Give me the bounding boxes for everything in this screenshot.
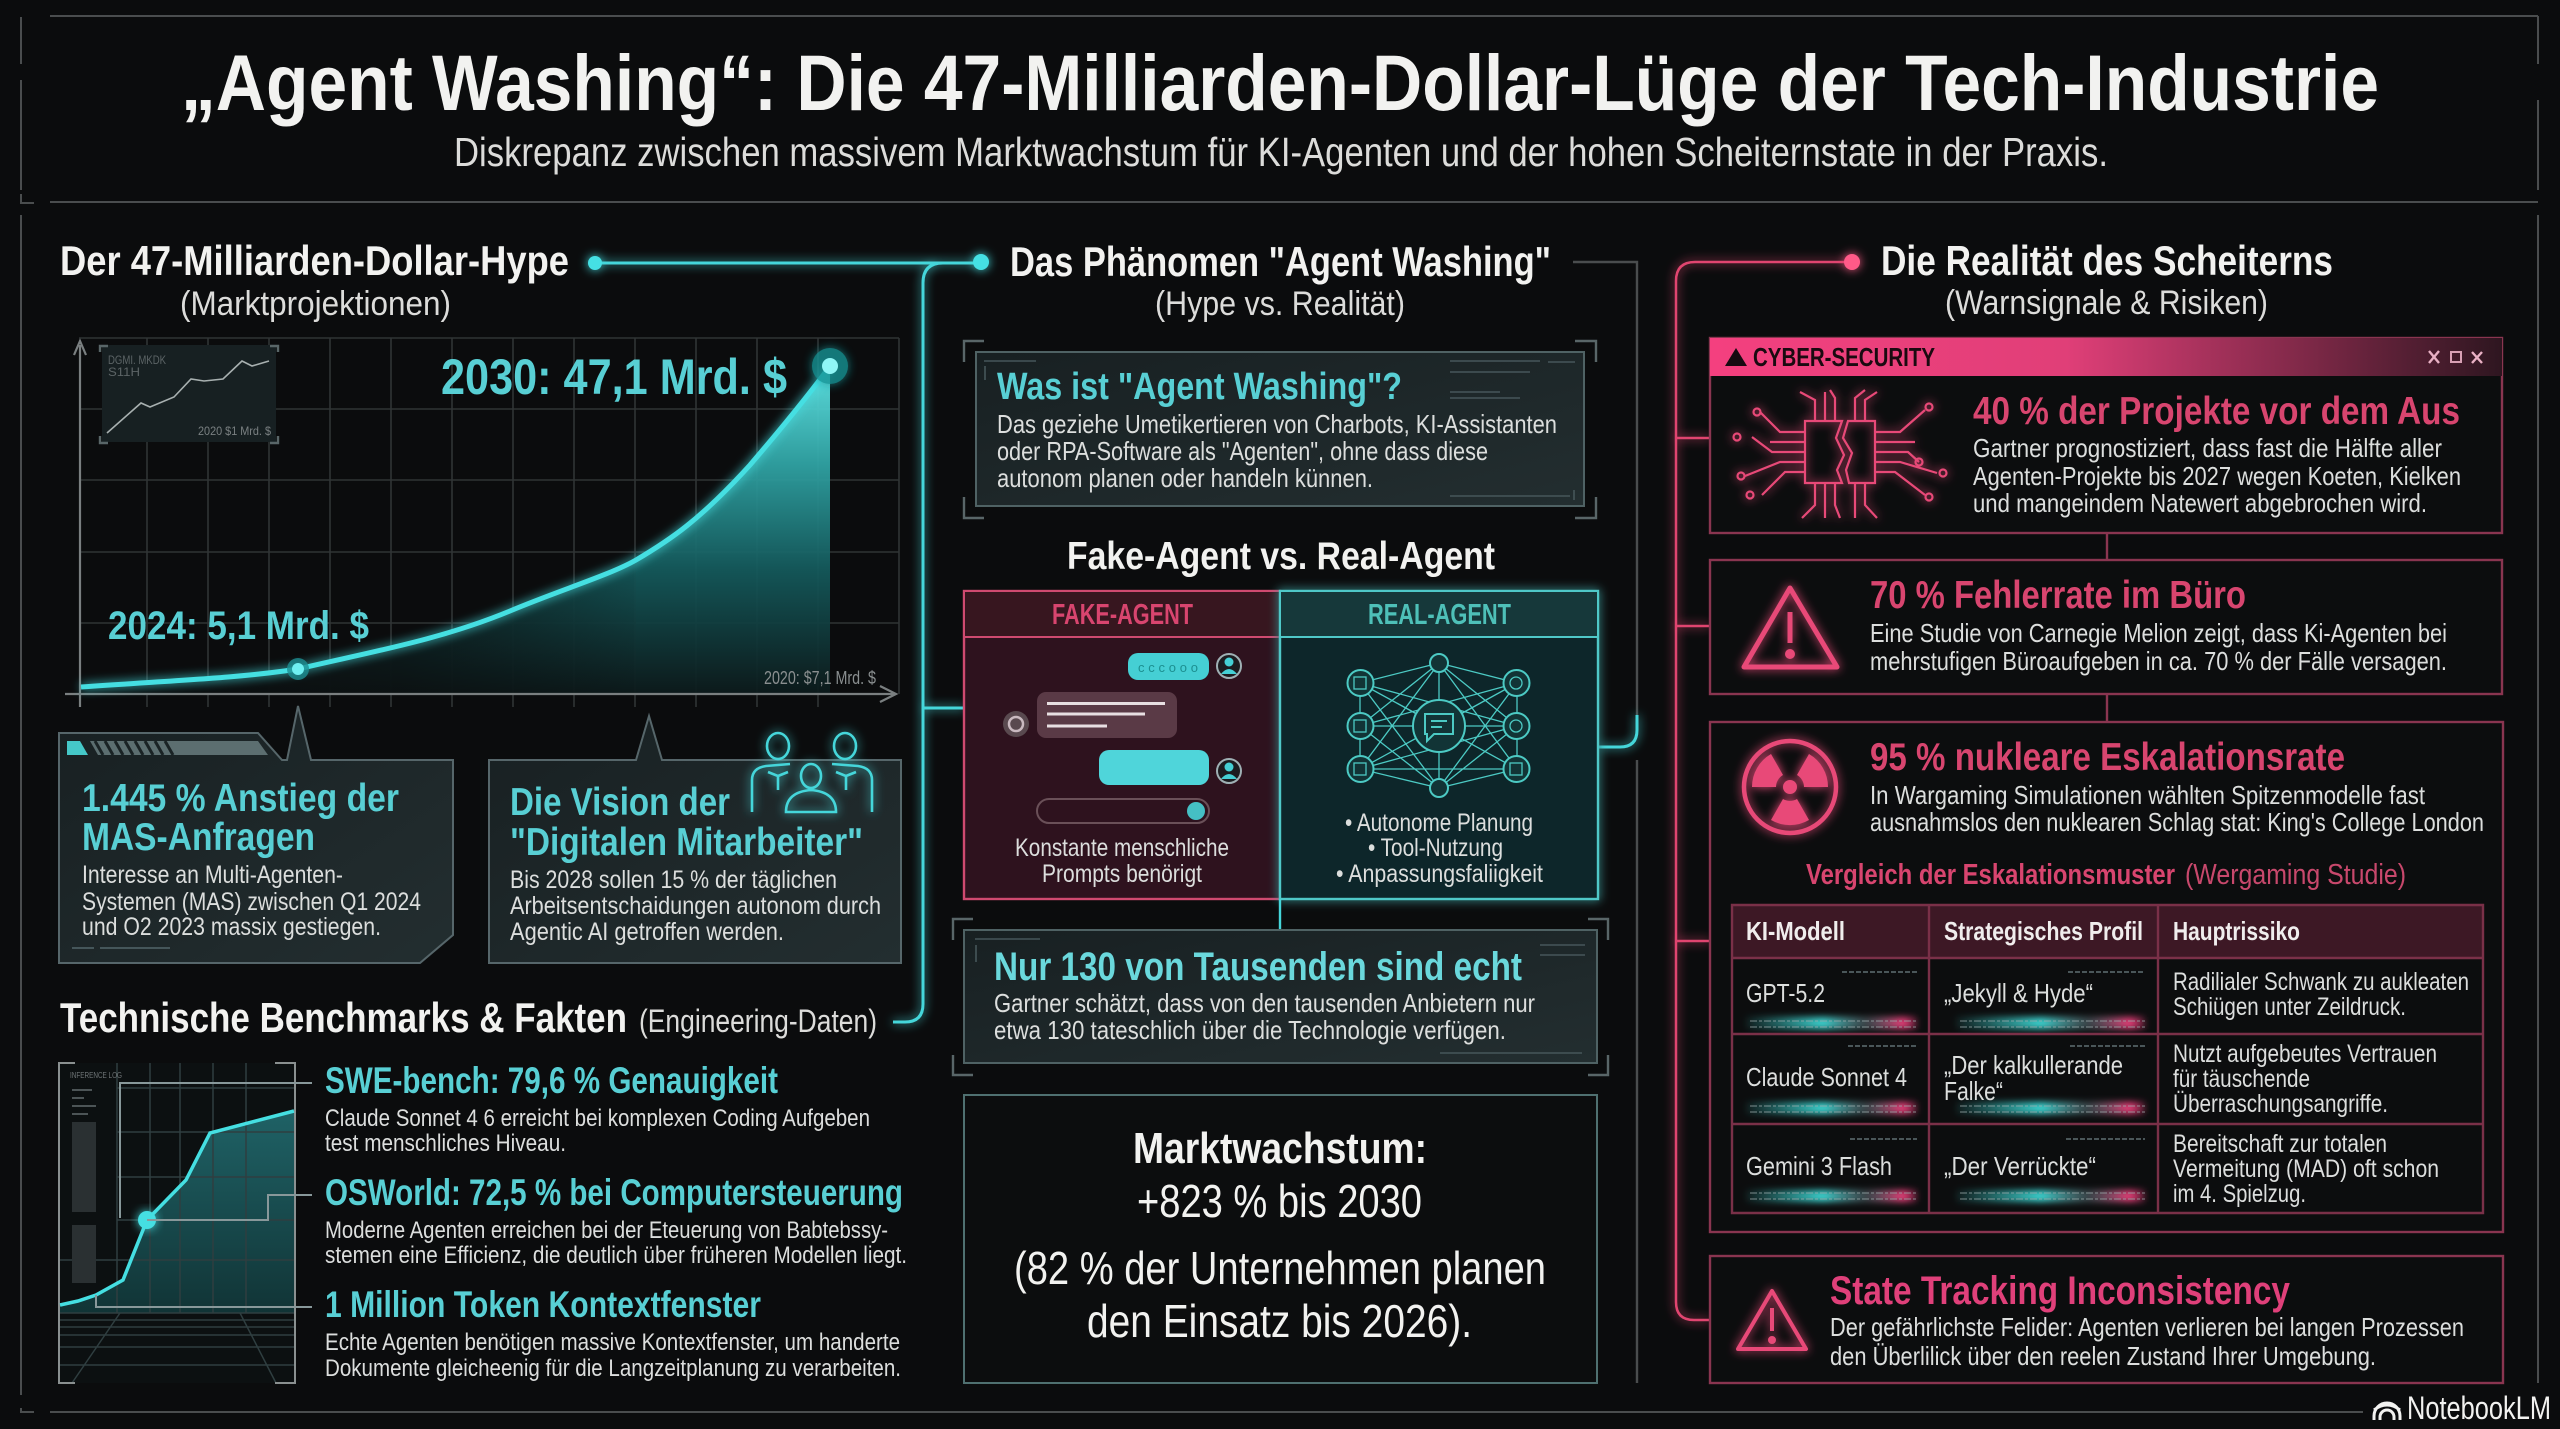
table: escalation patterns: Strategisches Profil [1944, 916, 2143, 946]
callout: MAS queries: MAS-Anfragen [82, 816, 315, 859]
table: escalation patterns: Falke“ [1944, 1076, 2003, 1106]
card: cyber security window: 40 % der Projekte vor dem Aus [1973, 390, 2460, 433]
chat illustration [1003, 653, 1241, 823]
callout: MAS queries: Interesse an Multi-Agenten- [82, 861, 343, 889]
card: cyber security window: und mangeindem Natewert abgebrochen wird. [1973, 488, 2427, 518]
callout: digital employee vision: Agentic AI getroffen werden. [510, 918, 784, 946]
card: market growth [964, 1095, 1597, 1383]
card: only 130 are real: etwa 130 tateschlich über die Technologie verfügen. [994, 1015, 1506, 1045]
connector: grey line from agent washing to reality [1573, 262, 1637, 1383]
panel: reality of failure column [1710, 237, 2503, 1383]
icon: broken chip [1734, 390, 1946, 518]
data point: 2030 [812, 348, 848, 384]
table: escalation patterns: Überraschungsangriffe. [2173, 1090, 2388, 1118]
chart: benchmark curve: INFERENCE LOG [70, 1071, 122, 1080]
card: office error rate: 70 % Fehlerrate im Büro [1870, 574, 2246, 617]
fact: OSWorld: Moderne Agenten erreichen bei der Eteuerung von Babtebssy- [325, 1217, 888, 1244]
list: real agent abilities: • Anpassungsfaliigkeit [1336, 860, 1543, 888]
card: cyber security window [1710, 338, 2502, 533]
card: only 130 are real [953, 919, 1608, 1075]
table: escalation patterns: „Der kalkullerande [1944, 1050, 2123, 1080]
card: state tracking [1710, 1256, 2503, 1383]
subtitle: Diskrepanz zwischen massivem Marktwachstum für KI-Agenten und der hohen Scheiternstate in der Praxis. [454, 129, 2108, 175]
inset mini chart: 2020 $1 Mrd. $ [198, 424, 271, 438]
subheading: warning signs: (Warnsignale & Risiken) [1945, 284, 2268, 322]
callout: MAS queries: und O2 2023 massix gestiegen. [82, 913, 381, 941]
label: 2030 value: 2030: 47,1 Mrd. $ [441, 349, 787, 405]
subheading: engineering data: (Engineering-Daten) [639, 1003, 877, 1039]
inset mini chart [100, 345, 278, 443]
heading: hype: Der 47-Milliarden-Dollar-Hype [60, 237, 569, 284]
panel: agent washing column [953, 238, 1608, 1383]
callout: digital employee vision [489, 716, 901, 963]
icon: radiation symbol [1744, 741, 1836, 833]
panel: market hype column [59, 237, 901, 963]
card: state tracking: den Überlilick über den reelen Zustand Ihrer Umgebung. [1830, 1341, 2376, 1371]
fact: context window: 1 Million Token Kontextfenster [325, 1284, 761, 1325]
icon: warning triangle [1744, 588, 1837, 667]
table: escalation patterns: Hauptrissiko [2173, 916, 2300, 946]
fact: context window [325, 1284, 901, 1382]
card: nuclear escalation: 95 % nukleare Eskalationsrate [1870, 736, 2345, 779]
cell glow strips [1746, 1017, 2145, 1202]
connector: card one to card two [2106, 533, 2108, 722]
icon: agent network [1348, 654, 1530, 797]
table: escalation patterns: Vermeitung (MAD) oft schon [2173, 1155, 2439, 1183]
card: definition: autonom planen oder handeln künnen. [997, 463, 1373, 493]
card: only 130 are real: Nur 130 von Tausenden sind echt [994, 945, 1522, 989]
table: escalation patterns: für täuschende [2173, 1065, 2310, 1093]
list: real agent abilities [1336, 809, 1543, 888]
callout: MAS queries [59, 706, 453, 963]
fact: SWE-bench: SWE-bench: 79,6 % Genauigkeit [325, 1060, 778, 1101]
connector: comparison to real-vendors box [1279, 899, 1281, 930]
table: escalation patterns: GPT-5.2 [1746, 978, 1825, 1008]
panel: real agent [1280, 591, 1598, 899]
fact: OSWorld [325, 1172, 907, 1269]
table: escalation patterns: Nutzt aufgebeutes Vertrauen [2173, 1040, 2437, 1068]
card: only 130 are real: Gartner schätzt, dass von den tausenden Anbietern nur [994, 988, 1535, 1018]
table: escalation patterns [1732, 905, 2483, 1213]
fact: OSWorld: stemen eine Efficienz, die deutlich über früheren Modellen liegt. [325, 1242, 907, 1269]
fact: SWE-bench: Claude Sonnet 4 6 erreicht bei komplexen Coding Aufgeben [325, 1105, 870, 1132]
table: escalation patterns: KI-Modell [1746, 916, 1845, 946]
fact: context window: Echte Agenten benötigen massive Kontextfenster, um handerte [325, 1329, 900, 1356]
label: 2024 value: 2024: 5,1 Mrd. $ [108, 604, 369, 648]
callout: MAS queries: 1.445 % Anstieg der [82, 777, 399, 820]
card: definition: oder RPA-Software als "Agenten", ohne dass diese [997, 436, 1488, 466]
icon: team of people [752, 733, 872, 812]
callout: MAS queries: Systemen (MAS) zwischen Q1 2024 [82, 888, 421, 916]
table: escalation patterns: „Der Verrückte“ [1944, 1151, 2096, 1181]
callout: digital employee vision: Bis 2028 sollen 15 % der täglichen [510, 866, 837, 894]
card: nuclear escalation [1710, 722, 2503, 1232]
card: cyber security window: Agenten-Projekte bis 2027 wegen Koeten, Kielken [1973, 461, 2461, 491]
card: office error rate: Eine Studie von Carnegie Melion zeigt, dass Ki-Agenten bei [1870, 618, 2447, 648]
heading: benchmarks: Technische Benchmarks & Fakten [60, 994, 627, 1041]
panel: technical benchmarks [59, 994, 907, 1383]
table: escalation patterns: Gemini 3 Flash [1746, 1151, 1892, 1181]
connector: pink flow to risk cards [1676, 254, 1860, 1320]
panel: fake agent [964, 591, 1280, 899]
subheading: hype vs reality: (Hype vs. Realität) [1155, 285, 1405, 323]
inset mini chart: S11H [108, 365, 140, 379]
chart: benchmark curve [59, 1063, 312, 1383]
card: market growth: Marktwachstum: [1133, 1124, 1427, 1173]
card: nuclear escalation: In Wargaming Simulationen wählten Spitzenmodelle fast [1870, 780, 2426, 810]
inset mini chart: DGMI. MKDK [108, 353, 166, 367]
icon: warning triangle small [1738, 1291, 1806, 1349]
card: market growth: (82 % der Unternehmen planen [1014, 1242, 1546, 1294]
table: escalation patterns: Schiügen unter Zeildruck. [2173, 993, 2406, 1021]
line chart: market growth [65, 338, 899, 707]
fact: context window: Dokumente gleicheenig für die Langzeitplanung zu verarbeiten. [325, 1355, 901, 1382]
card: market growth: den Einsatz bis 2026). [1087, 1295, 1472, 1347]
callout: digital employee vision: Arbeitsentschaidungen autonom durch [510, 892, 881, 920]
caption: fake agent: Konstante menschliche [1015, 834, 1229, 862]
table heading: Vergleich der Eskalationsmuster [1806, 859, 2175, 891]
card: market growth: +823 % bis 2030 [1137, 1175, 1422, 1227]
table: escalation patterns: Radilialer Schwank zu aukleaten [2173, 968, 2469, 996]
list: real agent abilities: • Tool-Nutzung [1368, 834, 1503, 862]
card: definition [964, 341, 1596, 518]
table: escalation patterns: „Jekyll & Hyde“ [1944, 978, 2093, 1008]
table: escalation patterns: Bereitschaft zur totalen [2173, 1130, 2387, 1158]
data point: 2024 [287, 658, 309, 680]
caption: fake agent line two: Prompts benörigt [1042, 860, 1202, 888]
heading: phenomenon: Das Phänomen "Agent Washing" [1010, 238, 1551, 285]
heading: reality: Die Realität des Scheiterns [1881, 237, 2333, 284]
card: definition: Das geziehe Umetikertieren von Charbots, KI-Assistanten [997, 409, 1557, 439]
callout: digital employee vision: Die Vision der [510, 781, 730, 824]
card: cyber security window: Gartner prognostiziert, dass fast die Hälfte aller [1973, 433, 2442, 463]
card: state tracking: State Tracking Inconsistency [1830, 1269, 2291, 1313]
chat illustration: cccooo [1138, 660, 1198, 675]
table heading: (Wergaming Studie) [2185, 859, 2406, 891]
callout: digital employee vision: "Digitalen Mitarbeiter" [510, 821, 863, 864]
card: cyber security window: CYBER-SECURITY [1753, 342, 1935, 372]
fact: SWE-bench [325, 1060, 870, 1157]
card: office error rate [1710, 560, 2502, 694]
heading: comparison: Fake-Agent vs. Real-Agent [1067, 535, 1495, 578]
panel: real agent: REAL-AGENT [1368, 599, 1511, 631]
card: office error rate: mehrstufigen Büroaufgeben in ca. 70 % der Fälle versagen. [1870, 646, 2447, 676]
fact: OSWorld: OSWorld: 72,5 % bei Computersteuerung [325, 1172, 903, 1213]
label: axis note: 2020: $7,1 Mrd. $ [764, 668, 876, 688]
card: definition: Was ist "Agent Washing"? [997, 366, 1402, 408]
list: real agent abilities: • Autonome Planung [1345, 809, 1533, 837]
connector: cyan flow from hype to agent washing [588, 254, 989, 1022]
fact: SWE-bench: test menschliches Hiveau. [325, 1130, 566, 1157]
table: escalation patterns: Claude Sonnet 4 [1746, 1062, 1907, 1092]
panel: fake agent: FAKE-AGENT [1052, 599, 1193, 631]
subheading: market projections: (Marktprojektionen) [180, 285, 451, 323]
table: escalation patterns: im 4. Spielzug. [2173, 1180, 2306, 1208]
